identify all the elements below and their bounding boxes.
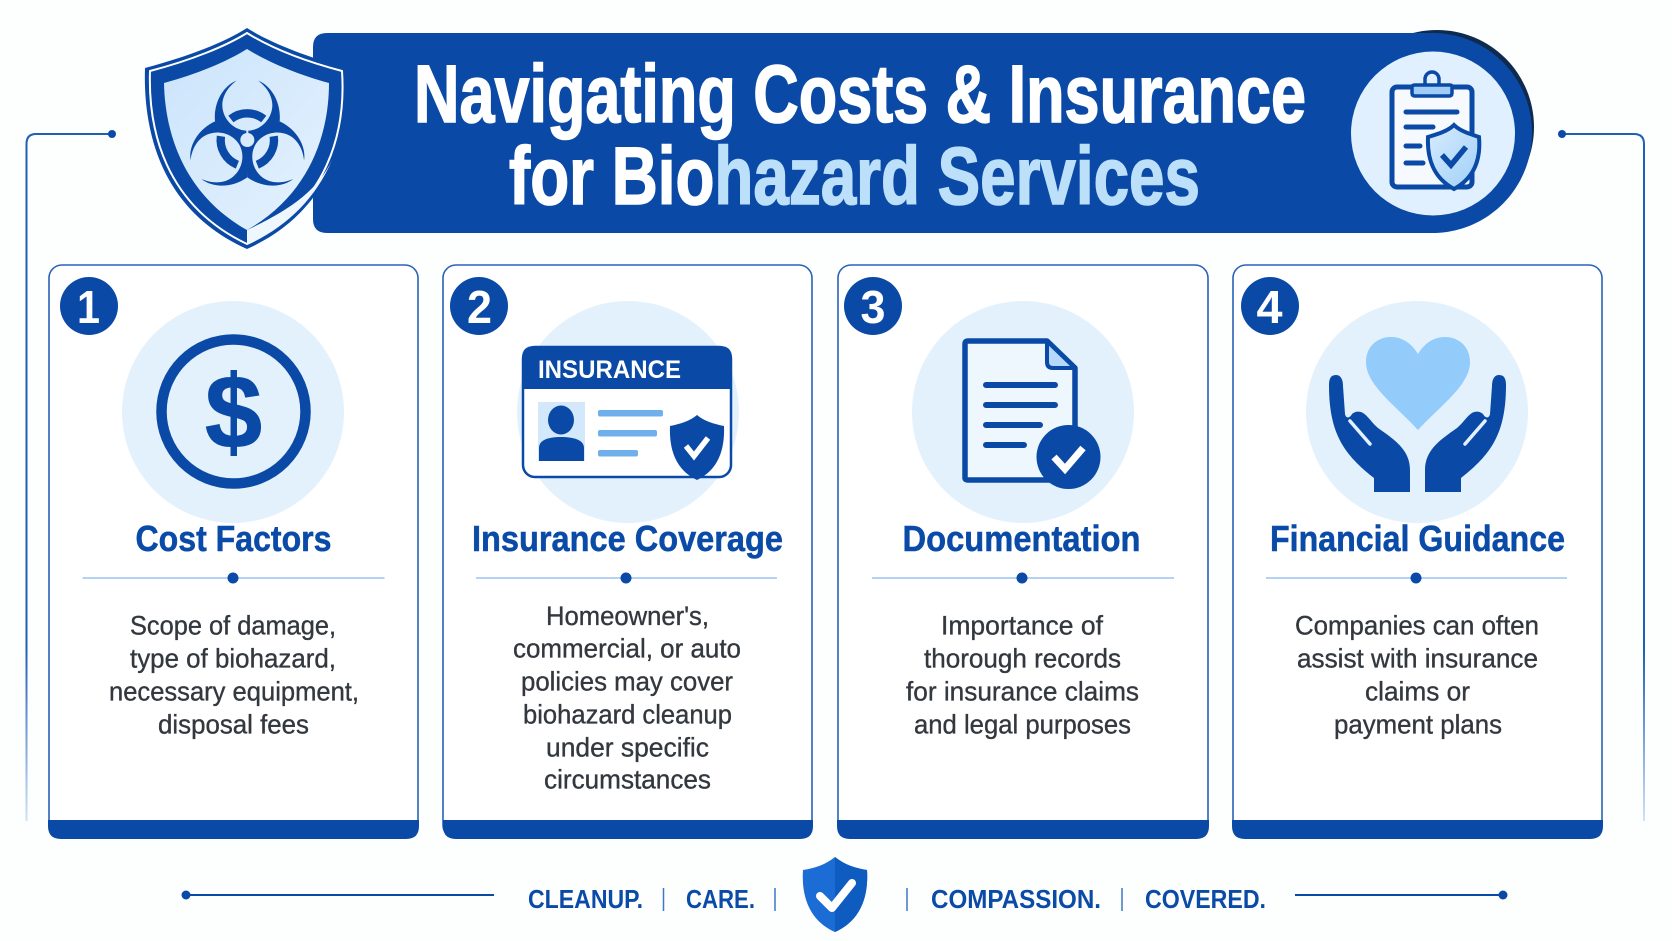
body text: assist with insurance [1297,644,1538,674]
card base bar [1232,820,1603,839]
footer tagline [182,857,1508,932]
body text: type of biohazard, [130,644,336,674]
body text [513,601,741,794]
number badge 3: 3 [860,281,886,333]
title banner [313,30,1534,233]
divider [82,572,384,584]
body text: necessary equipment, [109,676,359,706]
body text: Homeowner's, [546,601,709,631]
divider [476,572,777,584]
footer tagline: COMPASSION. [931,884,1101,914]
panel: cost factors [48,265,419,839]
heading: Financial Guidance [1270,518,1565,559]
number badge 1: 1 [77,281,100,333]
number badge 4: 4 [1256,281,1283,333]
title text: for Biohazard Services [509,131,1200,222]
body text: Companies can often [1295,610,1539,640]
body text: and legal purposes [914,710,1131,740]
body text: thorough records [924,644,1121,674]
icon: footer shield [803,857,867,932]
body text: for insurance claims [906,676,1139,706]
icon: dollar coin: $ [205,355,262,471]
biohazard symbol [180,81,315,198]
card base bar [48,820,419,839]
body text: under specific [546,732,709,762]
title text [414,49,1306,222]
number badge 1 [60,277,118,335]
body text [1295,610,1539,740]
number badge 4 [1241,277,1299,335]
panel: documentation [837,265,1209,839]
body text: payment plans [1334,710,1502,740]
body text [906,610,1139,740]
body text: commercial, or auto [513,634,741,664]
divider [1266,572,1567,584]
left connector line [26,130,116,821]
right connector line [1558,130,1644,821]
heading: Documentation [902,518,1140,559]
number badge 2: 2 [467,281,492,333]
icon: biohazard shield [145,28,348,249]
body text: claims or [1365,676,1470,706]
heading: Insurance Coverage [472,518,783,559]
icon: document with check [912,301,1134,523]
footer tagline: CARE. [686,884,755,914]
icon: insurance card [517,301,739,523]
body text: Scope of damage, [130,610,336,640]
card base bar [443,820,813,839]
footer tagline: CLEANUP. [528,884,643,914]
body text: policies may cover [521,666,733,696]
icon: clipboard with shield [1351,52,1515,216]
icon: dollar coin [122,301,344,523]
number badge 3 [844,277,902,335]
panel: financial guidance [1232,265,1603,839]
divider [872,572,1174,584]
body text: Importance of [941,610,1104,640]
icon: insurance card: INSURANCE [538,356,681,384]
panel: insurance coverage [443,265,813,839]
body text: disposal fees [158,710,309,740]
body text: circumstances [544,764,711,794]
title text: Navigating Costs & Insurance [414,49,1306,140]
card base bar [837,820,1209,839]
body text: biohazard cleanup [523,700,732,730]
body text [109,610,359,740]
footer tagline: COVERED. [1145,884,1266,914]
icon: hands holding heart [1306,301,1528,523]
heading: Cost Factors [136,518,332,559]
number badge 2 [450,277,508,335]
